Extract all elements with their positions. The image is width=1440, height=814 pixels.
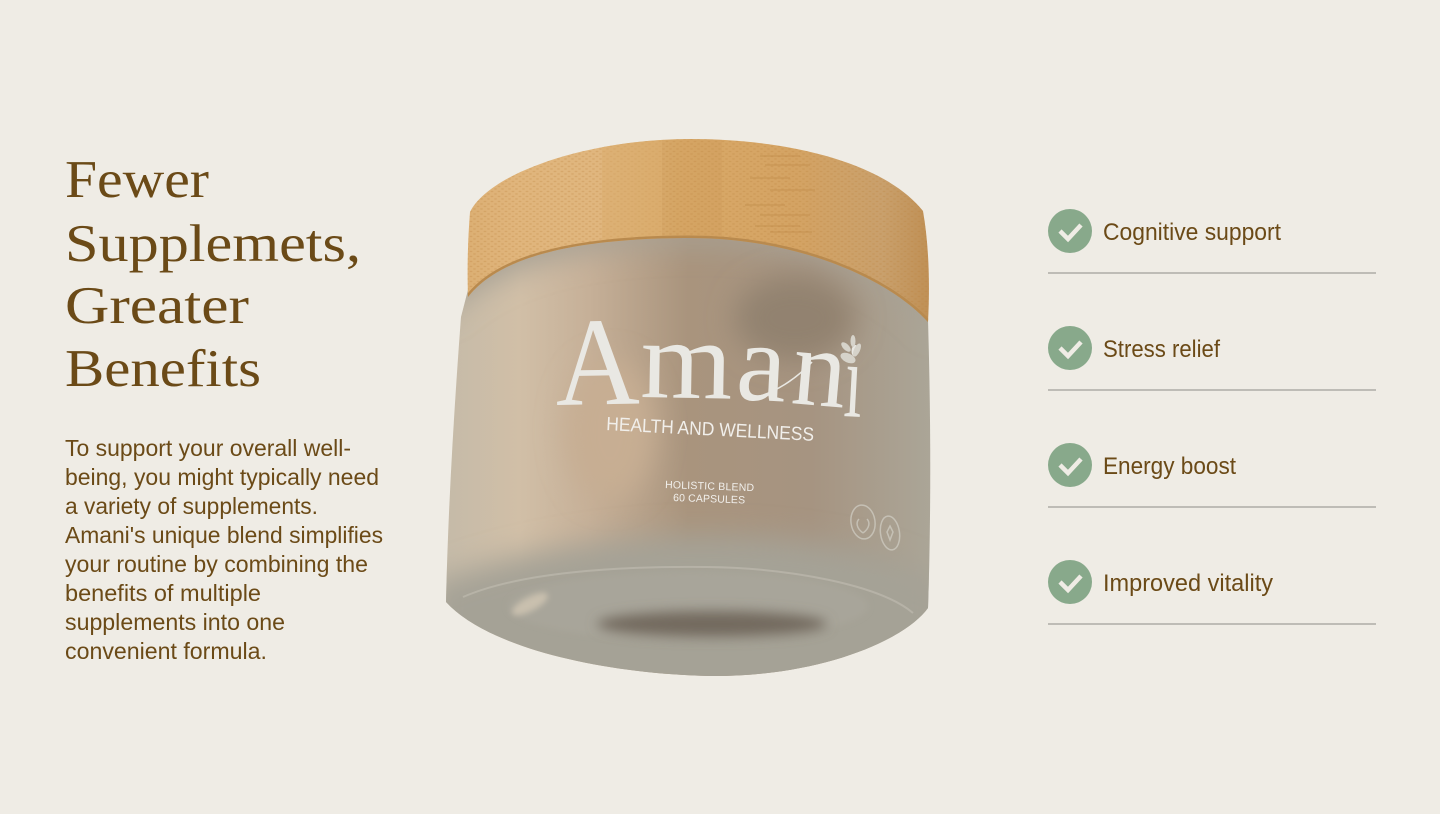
benefit: energy boost: [1048, 443, 1376, 508]
description text block: Amani's unique blend simplifies: [65, 522, 383, 548]
benefit: improved vitality: [1048, 560, 1376, 625]
jar brand label: HEALTH AND WELLNESS: [606, 414, 815, 446]
icon: certification badges: [849, 503, 902, 551]
jar brand label: m: [640, 298, 734, 424]
title: Benefits: [65, 340, 261, 398]
benefit: stress relief: Stress relief: [1103, 336, 1220, 363]
benefit: improved vitality: Improved vitality: [1103, 570, 1273, 597]
product jar: [446, 139, 930, 676]
description text block: being, you might typically need: [65, 464, 379, 490]
bamboo lid: [468, 139, 929, 322]
jar brand label: n: [788, 304, 852, 433]
description text block: benefits of multiple: [65, 580, 261, 606]
jar brand label: HOLISTIC BLEND: [665, 479, 755, 494]
description text block: your routine by combining the: [65, 551, 368, 577]
jar brand label: [554, 293, 866, 507]
icon: leaf sprig: [839, 335, 863, 365]
benefit: energy boost: Energy boost: [1103, 453, 1236, 480]
title: Greater: [65, 277, 249, 335]
jar brand label: A: [554, 293, 640, 433]
benefit: cognitive support: [1048, 209, 1376, 274]
infographic canvas: [65, 139, 1376, 676]
title: Fewer: [65, 151, 209, 209]
jar brand label: 60 CAPSULES: [673, 492, 745, 507]
jar body: [446, 238, 930, 676]
title: Supplemets,: [65, 215, 361, 273]
benefits list: [1048, 209, 1376, 625]
jar brand label: i: [842, 321, 866, 441]
description text block: supplements into one: [65, 609, 285, 635]
description text block: To support your overall well-: [65, 435, 351, 461]
title: [65, 151, 361, 398]
description text block: [65, 435, 383, 664]
benefit: cognitive support: Cognitive support: [1103, 219, 1281, 246]
description text block: a variety of supplements.: [65, 493, 318, 519]
benefit: stress relief: [1048, 326, 1376, 391]
description text block: convenient formula.: [65, 638, 267, 664]
jar brand label: a: [734, 300, 790, 427]
